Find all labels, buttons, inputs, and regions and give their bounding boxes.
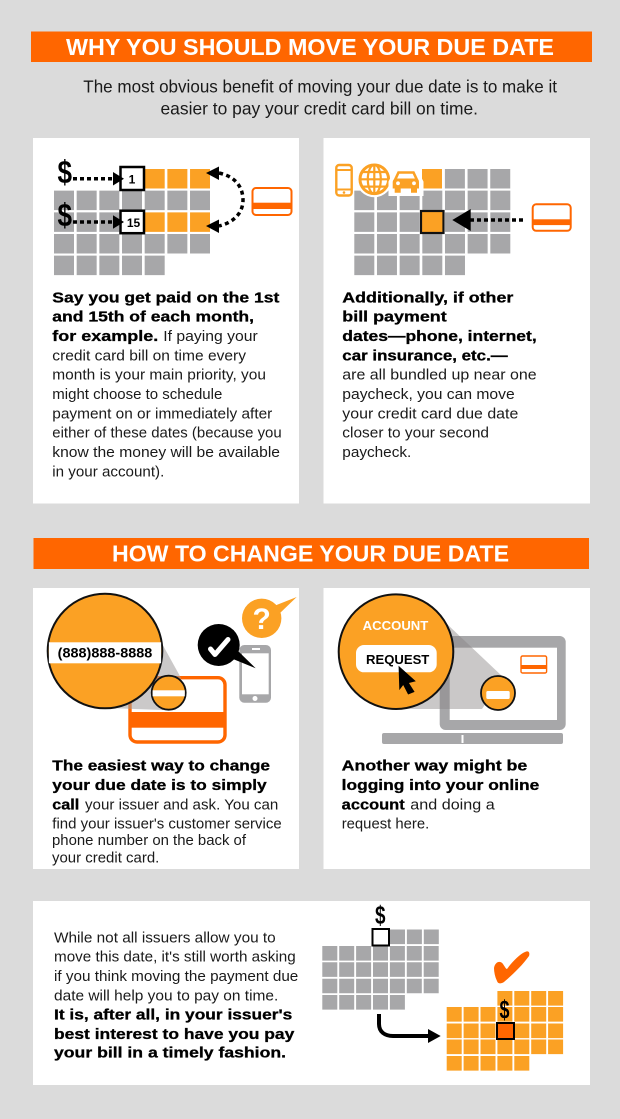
text block: paid on the 1st and 15th: credit card bill on time every	[52, 347, 247, 364]
icon: laptop	[382, 636, 566, 744]
intro text: easier to pay your credit card bill on time.	[160, 98, 478, 118]
small magnifier circle	[481, 676, 515, 710]
dollar sign and dotted arrow: 1st: $	[58, 154, 72, 190]
calendar grid with paydays: 15	[127, 216, 140, 230]
text block: paid on the 1st and 15th	[52, 289, 282, 480]
orange calendar with new due date: $	[500, 994, 510, 1024]
text block: bundled bill payment dates: are all bundled up near one	[342, 367, 537, 384]
icon: smartphone	[239, 645, 271, 703]
icon: credit card back	[130, 678, 225, 742]
calendar grid with paydays: 1	[129, 172, 136, 186]
text block: call your issuer: call	[52, 796, 79, 814]
text block: worth asking: While not all issuers allow you to	[54, 930, 276, 947]
icon: mouse cursor	[399, 667, 415, 694]
panel: bundled bill payment dates	[324, 138, 590, 504]
dollar sign and dotted arrow: 1st	[58, 154, 124, 190]
section header: how to change your due date	[34, 538, 589, 569]
calendar grid with paydays	[54, 167, 210, 265]
panel: worth asking	[33, 900, 590, 1085]
icon: car	[390, 168, 422, 194]
text block: paid on the 1st and 15th: for example.	[52, 328, 158, 345]
speech bubble: question mark: ?	[253, 603, 271, 636]
speech bubble: question mark	[242, 597, 297, 638]
intro text	[83, 77, 557, 118]
text block: call your issuer	[52, 758, 282, 867]
magnifier: phone number: (888)888-8888	[58, 645, 153, 660]
text block: paid on the 1st and 15th: payment on or immediately after	[52, 405, 272, 422]
gray calendar with old due date: $	[375, 900, 386, 930]
gray calendar with old due date	[322, 900, 440, 1002]
text block: paid on the 1st and 15th: either of these dates (because you	[52, 425, 282, 442]
dollar sign and dotted arrow: 15th: $	[58, 197, 72, 233]
panel: call your issuer	[33, 588, 299, 869]
text block: call your issuer: find your issuer's customer service	[52, 815, 282, 832]
text block: online account	[342, 758, 539, 832]
panel: paid on the 1st and 15th	[33, 138, 299, 504]
text block: call your issuer: your due date is to simply	[52, 777, 267, 794]
text block: bundled bill payment dates: dates—phone, internet,	[342, 328, 537, 345]
text block: paid on the 1st and 15th: Say you get paid on the 1st	[52, 289, 279, 306]
text block: paid on the 1st and 15th: know the money will be available	[52, 444, 280, 461]
text block: worth asking: date will help you to pay on time.	[54, 987, 278, 1004]
panel: online account	[324, 588, 590, 869]
magnifier: account request button: REQUEST	[366, 652, 429, 667]
text block: bundled bill payment dates: your credit card due date	[342, 405, 518, 422]
text block: paid on the 1st and 15th: in your account).	[52, 463, 164, 480]
magnifier: account request button	[339, 594, 453, 709]
orange calendar with new due date	[447, 994, 565, 1063]
text block: bundled bill payment dates: bill payment	[342, 309, 447, 326]
icon: credit card	[533, 204, 571, 231]
text block: bundled bill payment dates: paycheck.	[342, 444, 411, 461]
text block: online account: Another way might be	[342, 758, 527, 775]
text block: worth asking: your bill in a timely fashion.	[54, 1044, 286, 1061]
icon: small credit card on screen	[521, 656, 547, 673]
text block: bundled bill payment dates: paycheck, you can move	[342, 386, 515, 403]
curved arrow to new calendar	[379, 1014, 441, 1043]
text block: worth asking: move this date, it's still worth asking	[54, 949, 296, 966]
text block: paid on the 1st and 15th: and 15th of each month,	[52, 309, 254, 326]
intro text: The most obvious benefit of moving your due date is to make it	[83, 77, 557, 97]
text block: worth asking: It is, after all, in your issuer's	[54, 1007, 292, 1024]
icon: orange check mark	[494, 951, 529, 983]
text block: worth asking	[54, 930, 298, 1061]
text block: bundled bill payment dates: Additionally, if other	[342, 289, 513, 306]
magnifier: phone number	[48, 594, 162, 708]
icon: phone	[336, 165, 352, 196]
dotted arrow from card to box	[452, 209, 523, 231]
text block: bundled bill payment dates: closer to your second	[342, 425, 489, 442]
magnifier: account request button: ACCOUNT	[363, 618, 428, 633]
text block: online account: account	[342, 796, 405, 813]
calendar grid	[354, 169, 510, 265]
text block: worth asking: if you think moving the payment due	[54, 968, 298, 985]
text block: call your issuer: your credit card.	[52, 850, 159, 867]
magnifier cone	[402, 625, 503, 709]
text block: paid on the 1st and 15th: If paying your	[163, 328, 258, 345]
speech bubble: check mark	[198, 624, 256, 668]
text block: bundled bill payment dates: car insurance, etc.—	[342, 347, 508, 364]
curved dotted double arrow	[206, 166, 243, 233]
icon: globe	[356, 161, 392, 197]
text block: call your issuer: your issuer and ask. You can	[85, 796, 278, 814]
dollar sign and dotted arrow: 15th	[58, 197, 124, 233]
text block: paid on the 1st and 15th: month is your main priority, you	[52, 367, 266, 384]
small magnifier circle	[152, 676, 186, 710]
section header: why you should move your due date: WHY YOU SHOULD MOVE YOUR DUE DATE	[66, 34, 554, 60]
text block: bundled bill payment dates	[342, 289, 537, 461]
text block: online account: and doing a	[410, 796, 495, 813]
text block: call your issuer: phone number on the back of	[52, 832, 247, 849]
text block: worth asking: best interest to have you pay	[54, 1026, 295, 1043]
section header: how to change your due date: HOW TO CHANGE YOUR DUE DATE	[112, 541, 509, 567]
icon: credit card	[252, 188, 292, 215]
magnifier cone	[108, 640, 181, 710]
text block: call your issuer: The easiest way to change	[52, 758, 270, 775]
text block: online account: logging into your online	[342, 777, 539, 794]
text block: online account: request here.	[342, 815, 429, 832]
highlighted due date box	[421, 211, 444, 233]
text block: paid on the 1st and 15th: might choose to schedule	[52, 386, 222, 403]
